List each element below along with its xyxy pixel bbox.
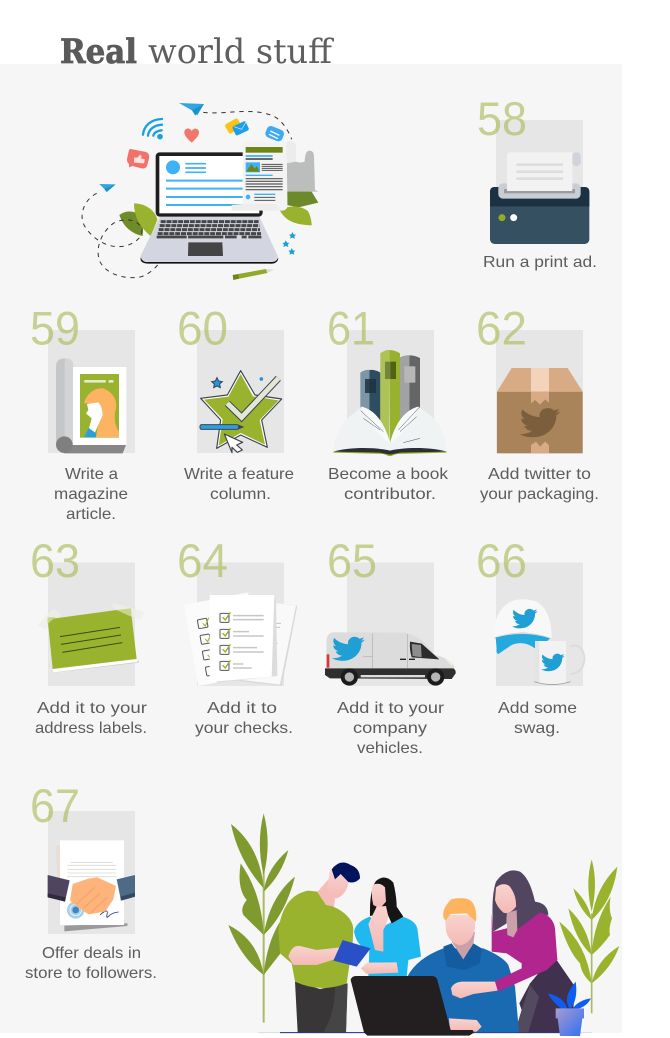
number: 62 xyxy=(476,302,527,354)
caption: your packaging. xyxy=(480,486,599,503)
laptop xyxy=(351,976,482,1036)
item 61: become a book contributor xyxy=(327,302,449,503)
number: 67 xyxy=(30,779,80,832)
caption xyxy=(25,945,157,982)
icon: van xyxy=(325,632,456,686)
dashed flight paths xyxy=(82,111,292,278)
caption xyxy=(337,700,445,757)
item 67: offer deals in store to followers xyxy=(25,779,157,982)
item 63: add it to your address labels xyxy=(30,534,148,737)
card xyxy=(347,330,434,453)
caption: swag. xyxy=(514,720,560,737)
icon: cap and mug xyxy=(494,599,584,684)
number: 58 xyxy=(477,92,527,145)
right plant xyxy=(559,859,619,1013)
card xyxy=(197,562,284,686)
card xyxy=(197,330,284,453)
item 65: add it to your company vehicles xyxy=(325,534,456,757)
item 64: add it to your checks xyxy=(177,534,297,737)
item 66: add some swag xyxy=(476,534,584,737)
card xyxy=(496,562,583,686)
illustration: laptop and newspaper xyxy=(82,103,318,280)
caption xyxy=(184,466,294,503)
caption: Run a print ad. xyxy=(483,254,597,271)
caption: vehicles. xyxy=(357,740,423,757)
icon: handshake over contract xyxy=(48,839,135,931)
caption: Write a xyxy=(65,466,118,483)
right leaves xyxy=(280,191,318,225)
newspaper scroll xyxy=(232,141,318,211)
caption: store to followers. xyxy=(25,965,157,982)
woman with magenta top xyxy=(492,870,575,1032)
caption xyxy=(328,466,449,503)
caption: Add twitter to xyxy=(488,466,591,483)
caption: contributor. xyxy=(344,486,436,503)
card xyxy=(496,330,583,453)
number: 64 xyxy=(177,534,228,587)
caption: column. xyxy=(210,486,271,503)
caption: Add it to your xyxy=(37,700,148,717)
number: 60 xyxy=(177,302,228,354)
caption: Write a feature xyxy=(184,466,294,483)
pencil xyxy=(233,269,274,280)
number: 63 xyxy=(30,534,80,587)
caption xyxy=(35,700,148,737)
caption xyxy=(498,700,577,737)
icon: heart xyxy=(184,128,199,143)
caption xyxy=(480,466,599,503)
illustration: team around a laptop xyxy=(228,813,619,1036)
man with blue shirt xyxy=(407,898,519,1032)
icon: address label xyxy=(37,603,145,673)
title: world stuff xyxy=(148,32,335,72)
laptop xyxy=(140,152,278,264)
title: Real xyxy=(60,32,137,72)
caption: company xyxy=(353,720,427,737)
icon: wifi xyxy=(143,119,162,138)
blue stars xyxy=(282,232,296,255)
number: 66 xyxy=(476,534,527,587)
caption: magazine xyxy=(54,486,128,503)
caption: article. xyxy=(66,506,116,523)
caption: Add some xyxy=(498,700,577,717)
icon: magazine xyxy=(56,358,126,453)
card xyxy=(48,811,135,934)
icon: check documents xyxy=(184,592,297,686)
icon: paper plane top xyxy=(179,103,204,116)
icon: mail xyxy=(224,118,249,136)
caption: Add it to your xyxy=(337,700,445,717)
woman with cyan top xyxy=(354,878,421,977)
item 60: write a feature column xyxy=(177,302,294,503)
card xyxy=(496,120,583,244)
title xyxy=(60,32,335,72)
pointing arm xyxy=(451,943,557,998)
icon: thumbs up bubble xyxy=(127,149,149,169)
icon: books xyxy=(333,350,447,456)
card xyxy=(347,562,434,686)
man with green top xyxy=(278,862,371,1032)
caption: Offer deals in xyxy=(42,945,141,962)
icon: cardboard box xyxy=(497,368,583,453)
icon: printer xyxy=(490,152,589,244)
icon: star with check xyxy=(200,371,282,453)
caption: Become a book xyxy=(328,466,449,483)
caption: your checks. xyxy=(195,720,293,737)
potted plant xyxy=(548,982,591,1036)
caption: address labels. xyxy=(35,720,147,737)
caption xyxy=(54,466,128,523)
number: 61 xyxy=(327,302,375,354)
item 62: add twitter to your packaging xyxy=(476,302,599,503)
card xyxy=(48,330,135,453)
number: 65 xyxy=(327,534,377,587)
icon: paper plane left xyxy=(99,184,116,192)
item 58: run a print ad xyxy=(477,92,597,271)
left leaves xyxy=(119,203,157,236)
card xyxy=(48,562,135,686)
number: 59 xyxy=(30,302,80,354)
item 59: write a magazine article xyxy=(30,302,135,523)
caption: Add it to xyxy=(207,700,277,717)
left plant xyxy=(228,813,295,1023)
caption xyxy=(195,700,293,737)
ground line xyxy=(258,1031,592,1034)
icon: chat bubble xyxy=(264,125,285,143)
